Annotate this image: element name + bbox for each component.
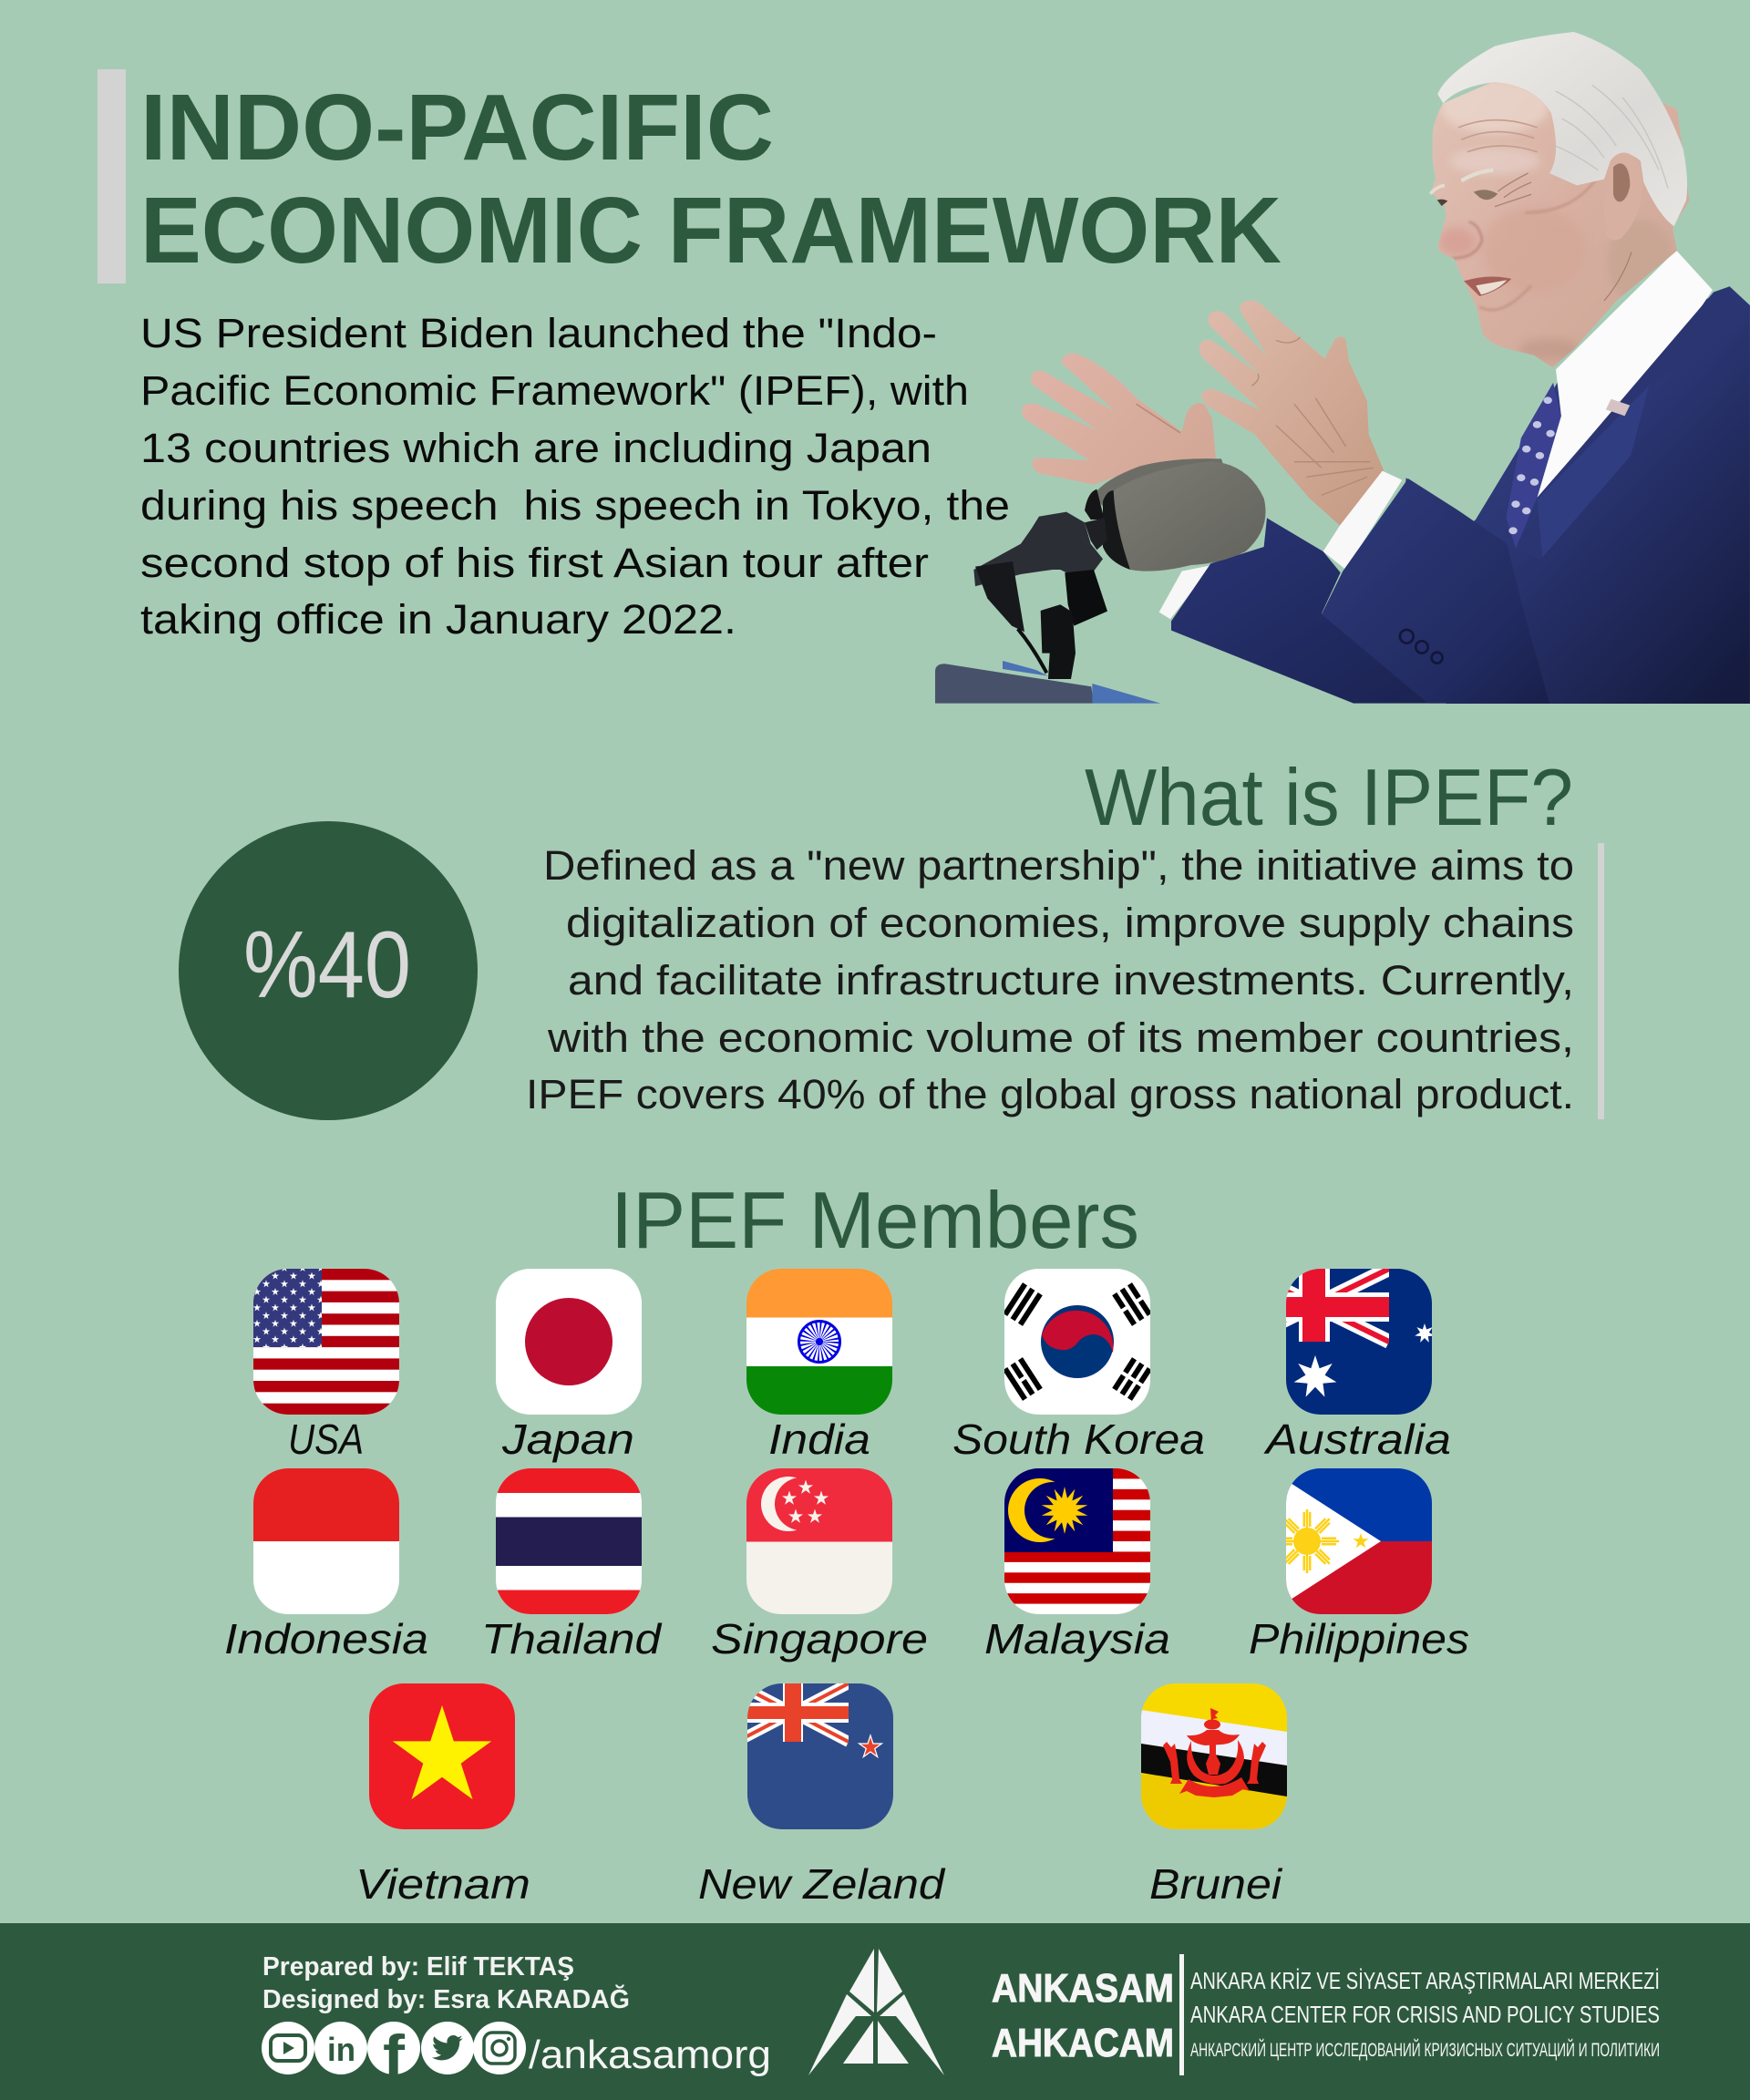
sleeve buttons	[1400, 630, 1443, 664]
country labels: South Korea	[952, 1415, 1205, 1463]
far cuff	[1159, 565, 1212, 619]
country labels: Indonesia	[224, 1615, 428, 1662]
icon: instagram	[473, 2022, 526, 2074]
icon: linkedin	[314, 2022, 367, 2074]
credits	[262, 1952, 630, 2014]
stat circle	[179, 821, 478, 1120]
heading: IPEF members: IPEF Members	[611, 1175, 1139, 1265]
jacket torso	[1393, 250, 1750, 704]
country labels: Australia	[1263, 1415, 1451, 1463]
icon: facebook	[367, 2022, 420, 2087]
country labels: Thailand	[481, 1615, 663, 1662]
side rule	[1598, 843, 1604, 1119]
shirt collar	[1537, 250, 1713, 498]
mouth	[1464, 276, 1511, 296]
flag: South Korea	[1003, 1269, 1152, 1415]
title block	[98, 69, 1282, 283]
photo: speaker at microphone	[935, 32, 1750, 704]
organization names: ANKASAM	[992, 1966, 1174, 2011]
intro paragraph: during his speech his speech in Tokyo, the	[140, 482, 1010, 529]
near sleeve	[1322, 479, 1549, 704]
flag: New Zealand	[736, 1683, 893, 1829]
icon: twitter	[421, 2022, 474, 2074]
intro paragraph: Pacific Economic Framework" (IPEF), with	[140, 367, 969, 414]
flag: Malaysia	[1004, 1468, 1150, 1614]
country labels	[224, 1415, 1469, 1908]
credits: Designed by: Esra KARADAĞ	[262, 1983, 630, 2014]
country labels: Philippines	[1249, 1615, 1469, 1662]
country labels: Brunei	[1149, 1860, 1283, 1908]
intro paragraph	[140, 310, 1010, 643]
country labels: Japan	[501, 1415, 634, 1463]
icon: youtube	[262, 2022, 314, 2074]
description paragraph: IPEF covers 40% of the global gross national product.	[526, 1071, 1574, 1117]
flag: Thailand	[496, 1468, 642, 1614]
social icons	[262, 2022, 526, 2087]
flag: Philippines	[1286, 1468, 1432, 1614]
stat circle: %40	[243, 912, 411, 1018]
flag: Australia	[1286, 1269, 1432, 1415]
icon: facebook: f	[383, 2024, 405, 2087]
social handle: /ankasamorg	[529, 2033, 771, 2077]
far sleeve	[1171, 518, 1458, 704]
ear	[1610, 153, 1634, 241]
country labels: Malaysia	[984, 1615, 1170, 1662]
organization names: AHKACAM	[992, 2021, 1174, 2065]
country labels: USA	[288, 1415, 364, 1463]
heading: what is IPEF: What is IPEF?	[1085, 752, 1573, 842]
credits: Prepared by: Elif TEKTAŞ	[262, 1952, 574, 1982]
logo: ANKASAM mark	[808, 1949, 944, 2075]
intro paragraph: second stop of his first Asian tour after	[140, 540, 929, 586]
hands sleeves and microphone	[935, 300, 1549, 704]
country labels: India	[768, 1415, 870, 1463]
description paragraph: Defined as a "new partnership", the initiative aims to	[543, 842, 1574, 889]
description paragraph: with the economic volume of its member countries,	[547, 1014, 1574, 1061]
country labels: Singapore	[711, 1615, 928, 1662]
description paragraph: digitalization of economies, improve supply chains	[566, 900, 1574, 946]
country labels: New Zeland	[698, 1860, 946, 1908]
title accent bar	[98, 69, 126, 283]
description paragraph	[526, 842, 1574, 1117]
organization names	[992, 1954, 1660, 2075]
lapel pin	[1606, 399, 1630, 416]
description paragraph: and facilitate infrastructure investments. Currently,	[568, 957, 1574, 1004]
flag: Singapore	[746, 1468, 892, 1614]
lapel	[1584, 286, 1730, 443]
head	[1430, 32, 1689, 367]
microphone foam	[1097, 458, 1223, 507]
country labels: Vietnam	[355, 1860, 530, 1908]
intro paragraph: 13 countries which are including Japan	[140, 425, 932, 471]
intro paragraph: taking office in January 2022.	[140, 596, 736, 643]
flag grid	[253, 1269, 1435, 1829]
panel: what is IPEF	[179, 752, 1604, 1120]
near cuff	[1323, 471, 1402, 570]
title: ECONOMIC FRAMEWORK	[140, 178, 1282, 283]
flag: USA	[253, 1269, 399, 1415]
microphone stand	[1085, 518, 1107, 550]
footer band	[0, 1923, 1750, 2100]
title: INDO-PACIFIC	[140, 75, 774, 180]
eye and brow	[1437, 200, 1447, 206]
flag: Indonesia	[253, 1468, 399, 1614]
title	[140, 75, 1282, 283]
far hand	[1022, 354, 1216, 485]
flag: India	[746, 1269, 892, 1415]
icon: linkedin: in	[327, 2031, 355, 2068]
flag: Brunei	[1141, 1683, 1287, 1829]
flag: Vietnam	[369, 1683, 515, 1829]
lectern	[935, 664, 1094, 704]
tie	[1506, 383, 1561, 549]
hair	[1437, 32, 1687, 226]
flag: Japan	[496, 1269, 642, 1415]
intro paragraph: US President Biden launched the "Indo-	[140, 310, 937, 356]
near hand	[1199, 300, 1384, 526]
